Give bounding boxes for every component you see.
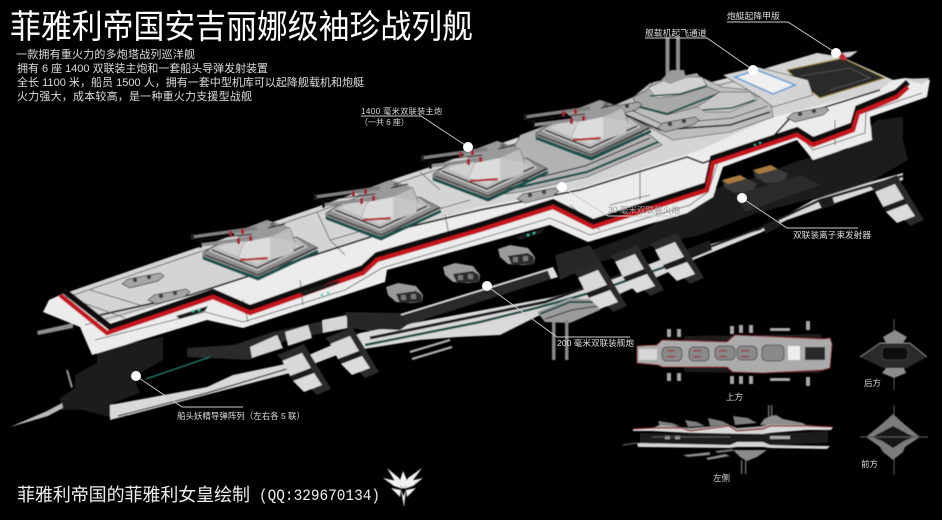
description text — [16, 47, 364, 103]
callout: 200mm guns: 200 毫米双联装舰炮 — [557, 337, 634, 348]
deck panel lines — [75, 93, 922, 340]
lower hull trim — [118, 368, 290, 416]
main deck — [43, 53, 930, 355]
description text: 拥有 6 座 1400 双联装主炮和一套船头导弹发射装置 — [17, 61, 268, 75]
dome under ship — [537, 298, 603, 323]
top view — [637, 321, 832, 386]
dark keel band — [187, 313, 400, 360]
label: rear view: 后方 — [864, 378, 881, 388]
white segments on keel band — [250, 315, 347, 358]
launch passage — [735, 70, 795, 94]
callout: main guns — [360, 106, 473, 152]
stripe: black — [63, 82, 908, 327]
main turrets — [191, 100, 651, 279]
black deck line — [100, 90, 880, 315]
200mm gun turrets — [386, 245, 535, 303]
label: top view: 上方 — [726, 392, 743, 402]
credit text: 菲雅利帝国的菲雅利女皇绘制 — [17, 485, 250, 505]
bow dark section — [60, 337, 163, 417]
hangar rear block — [555, 245, 600, 280]
callout: ion beam emitters — [737, 193, 871, 240]
ship illustration — [10, 37, 930, 427]
mid superstructure — [610, 75, 773, 140]
stripe: red — [60, 87, 908, 333]
front view — [860, 405, 928, 475]
lower white hull — [110, 173, 903, 420]
stern dark pad — [787, 58, 885, 98]
callout: 30mm guns — [557, 182, 680, 216]
credit text: (QQ:329670134) — [259, 487, 380, 505]
strip beside 200mm guns — [400, 267, 558, 325]
callout: gunboat deck: 炮艇起降甲版 — [727, 10, 780, 21]
deck gun platforms — [122, 102, 829, 304]
upper deck shading — [60, 53, 893, 322]
masts — [666, 37, 680, 81]
title: 菲雅利帝国安吉丽娜级袖珍战列舰 — [10, 8, 473, 45]
stern flags — [838, 51, 930, 84]
lower guns — [410, 340, 452, 359]
stage under turrets — [480, 120, 662, 197]
callout: bow missile array: 船头妖精导弹阵列（左右各 5 联） — [177, 411, 305, 421]
callout: gunboat deck — [727, 10, 841, 58]
callout: 30mm guns: 30 毫米双联装火炮 — [608, 204, 680, 215]
label: side view: 左侧 — [713, 473, 730, 483]
side view — [623, 405, 833, 474]
callout: 200mm guns — [482, 281, 634, 348]
callout: launch passage: 舰载机起飞通道 — [645, 27, 707, 38]
teal lamps — [176, 228, 545, 319]
deck top edge line — [62, 75, 760, 299]
lower masts — [552, 320, 568, 360]
ion beam emitters — [722, 165, 820, 212]
callout: launch passage — [645, 27, 758, 75]
stern dark body — [560, 117, 908, 272]
callout: main guns: （一共 6 座） — [360, 117, 409, 127]
callout: ion beam emitters: 双联装离子束发射器 — [793, 229, 871, 240]
callout: bow missile array — [131, 371, 305, 421]
description text: 火力强大，成本较高，是一种重火力支援型战舰 — [17, 89, 252, 103]
callout: main guns: 1400 毫米双联装主炮 — [361, 106, 442, 116]
bridge tier — [633, 73, 720, 115]
icon: emblem — [383, 468, 423, 507]
flight deck block — [723, 67, 813, 107]
credit text — [17, 485, 380, 505]
fins — [277, 175, 924, 395]
description text: 全长 1100 米，船员 1500 人，拥有一套中型机库可以起降舰载机和炮艇 — [17, 75, 364, 89]
description text: 一款拥有重火力的多炮塔战列巡洋舰 — [16, 47, 195, 61]
label: front view: 前方 — [861, 459, 878, 469]
bow spikes — [10, 403, 63, 427]
rear view — [860, 319, 927, 390]
